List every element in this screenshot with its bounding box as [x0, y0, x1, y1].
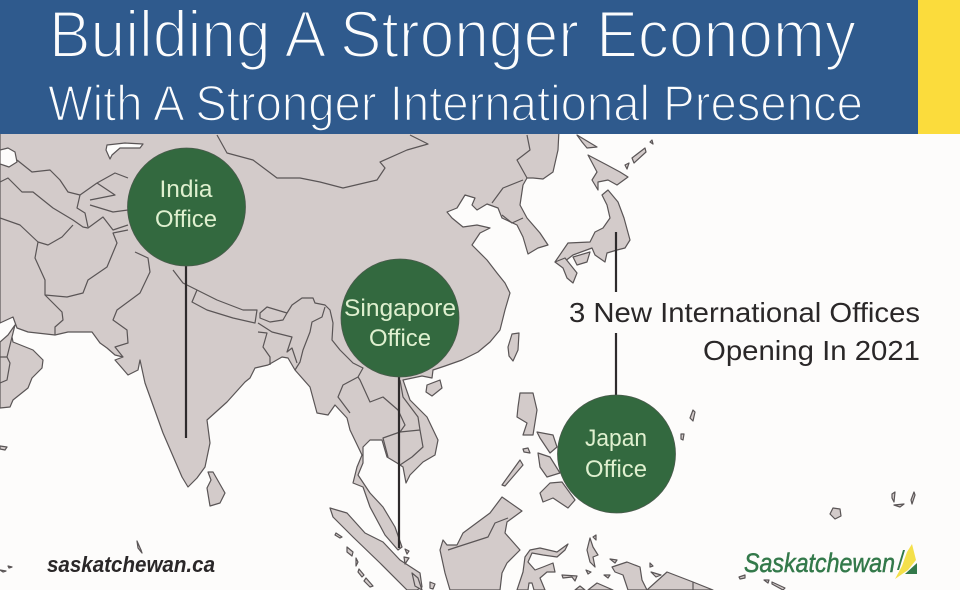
callout: 3 new offices: [569, 297, 920, 366]
pin: Japan office: [558, 395, 676, 513]
Sri Lanka: [207, 472, 225, 506]
Sulawesi: [517, 544, 568, 590]
Caspian and Black seas: [0, 143, 143, 167]
title: With A Stronger International Presence: [48, 76, 863, 132]
Arabian interior border: [0, 337, 12, 383]
header banner: [0, 0, 960, 134]
New Guinea and Moluccas: [575, 538, 713, 590]
pin: Singapore office: [341, 259, 459, 377]
callout: 3 new offices: Opening In 2021: [703, 335, 920, 366]
Philippines: [502, 393, 575, 508]
title: [48, 0, 863, 132]
pin: Japan office: Office: [585, 456, 647, 483]
Japan: Hokkaido: [588, 155, 628, 190]
Arabian peninsula: [0, 325, 43, 408]
Sakhalin and Kurils: [577, 135, 653, 169]
icon: wheat sheaf: [895, 544, 917, 579]
pin lines: [186, 232, 616, 548]
pin: Singapore office: Office: [369, 325, 431, 352]
Saskatchewan logo: Saskatchewan: [744, 548, 895, 578]
Japan: Honshu: [555, 190, 630, 265]
mainland Asia: [0, 130, 559, 550]
Taiwan: [508, 333, 519, 361]
map of Asia: [0, 130, 915, 590]
pin: Singapore office: Singapore: [344, 295, 456, 322]
callout: 3 new offices: 3 New International Offices: [569, 297, 920, 328]
Sumatra: [330, 508, 422, 590]
Japan: Kyushu: [555, 258, 577, 283]
pin: India office: [128, 148, 246, 266]
yellow accent block: [918, 0, 960, 134]
Hainan: [426, 380, 442, 396]
pin: India office: Office: [155, 206, 217, 233]
small islands: [0, 410, 915, 590]
website url: saskatchewan.ca: [47, 552, 215, 577]
Borneo: [440, 497, 522, 590]
pin: India office: India: [160, 176, 213, 203]
Japan: Shikoku: [573, 252, 590, 265]
pin: Japan office: Japan: [585, 425, 647, 452]
country borders: [0, 135, 530, 465]
